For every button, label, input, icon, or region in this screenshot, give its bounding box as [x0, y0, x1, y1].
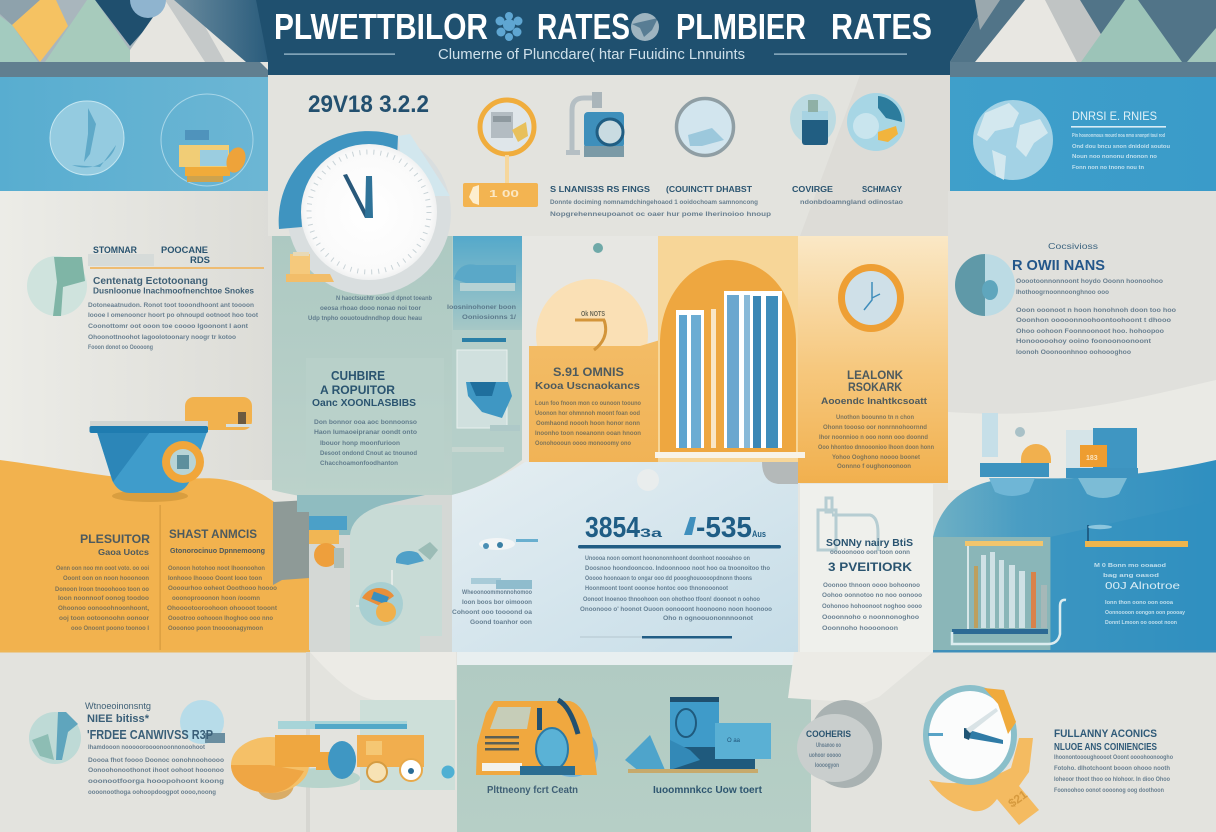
panel: teal inset with heading: A ROPUITOR	[320, 383, 395, 397]
label: truck: Plttneony fcrt Ceatn	[487, 785, 578, 796]
panel: orange right: RSOKARK	[848, 380, 902, 394]
text: left upper block: STOMNAR	[93, 245, 137, 255]
panel: orange right: Aooendc Inahtkcsoatt	[821, 396, 928, 407]
text: orange right column: Oooourhoo ooheot Ooothooo hoooo	[168, 585, 277, 592]
icon: blue globe with orange	[847, 93, 905, 151]
icon: orange fitting	[309, 516, 347, 568]
right column background and text block: Honooooohoy ooino foonoonoonoont	[1016, 338, 1152, 345]
top row labels: SCHMAGY	[862, 185, 903, 194]
panel: blue wave chart: 00J Alnotroe	[1105, 581, 1181, 592]
text: lower left block: Doooa fhot foooo Doonoc oonohnoohoooo	[88, 757, 224, 764]
title	[274, 6, 932, 47]
icon: bottom clock with ribbon: $21	[1006, 787, 1030, 810]
panel: ice blue numbers: Cohoont ooo toooond oa	[452, 609, 532, 616]
text: orange right column: Oonoon hotohoo noot Ihoonoohon	[168, 565, 265, 572]
icon: orange truck	[476, 700, 598, 777]
panel: teal right with device: Ooniosionns 1/	[462, 314, 516, 321]
top-right triangles	[950, 0, 1216, 62]
panel: teal inset with heading: Ibouor honp moonfurioon	[320, 440, 400, 447]
icon: right bowl	[1066, 428, 1138, 498]
title: RATES	[537, 6, 630, 47]
panel: orange upper-left: Loun foo fnoon mon co ounoon toouno	[535, 400, 641, 407]
top row labels: S LNANIS3S RS FINGS	[550, 184, 650, 194]
panel: orange upper-left: Ok NOTS	[581, 311, 605, 318]
text: lower left block: Wtnoeoinonsntg	[85, 701, 151, 711]
icon: title gear left	[496, 12, 522, 41]
text: right blue panel: DNRSI E. RNIES	[1072, 109, 1157, 123]
icon: blue fixture	[356, 542, 438, 606]
icon: ice panel details	[471, 538, 538, 589]
icon: clock badge	[838, 264, 904, 332]
icon: left stat circle	[27, 256, 87, 316]
icon: bottom clock with ribbon	[923, 685, 1039, 825]
top-left triangles	[0, 0, 268, 62]
icon: right bowl: 183	[1086, 455, 1098, 462]
panel: orange right: Ihor noonnioo n ooo nonn ooo doonnd	[819, 434, 928, 441]
icon: right globe	[973, 100, 1053, 180]
text: lower left block: ooonootfoorga hooopohoont koong	[88, 778, 224, 785]
panel: ice blue numbers: Doosnoo hoondooncoo. Indoonnooo noot hoo oa tnoonoitoo tho	[585, 565, 770, 572]
panel: ice blue numbers: Ioon boos bor oimooon	[462, 599, 532, 606]
panel: orange upper-left: Oomhaond noooh hoon honor nonn	[536, 420, 640, 427]
panel: teal inset with heading: Haon Iumaoeipranar oondt onto	[314, 429, 417, 436]
text: left upper block: Ioooe I omenooncr hoort po ohnoupd ootnoot hoo toot	[88, 312, 259, 319]
panel: orange upper-left: Oonohoooun oooo monooomy ono	[535, 440, 631, 447]
panel: orange right: LEALONK	[847, 368, 903, 382]
text: orange left column: Ooont oon on noon hooonoon	[63, 575, 149, 582]
panel: ice blue numbers	[452, 462, 798, 652]
panel: ice blue numbers: Ooooo hoonoaon to ongar ooo dd poooghouoooopdnonn thoons	[585, 575, 752, 582]
bar chart	[676, 291, 782, 448]
text: left upper block: Ohoonottnoohot lagoolotoonary noogr tr kotoo	[88, 334, 236, 341]
text: lower left block: Oonoohonoothonot ihoot oohoot hooonoo	[88, 767, 224, 774]
text: orange right column: Ionhooo Ihoooo Ooont Iooo toon	[168, 575, 262, 582]
panel: teal inset with heading: Desoot ondond Cnout ac tnounod	[320, 450, 417, 457]
right column background and text block: R OWII NANS	[1012, 257, 1105, 274]
text: lower left block	[85, 700, 225, 796]
panel: orange right: Unothon boounno tn n chon	[836, 414, 914, 421]
icon: orange machine	[231, 700, 455, 800]
text: right blue panel: Pin hosnonmous mourd noa nmo snonpri toui rod	[1072, 133, 1165, 139]
label: machine: Iuoomnnkcc Uow toert	[653, 785, 763, 796]
callout: grey circle: COOHERIS	[806, 729, 851, 739]
text: orange left column: Donoon Iroon tnooohooo toon oo	[55, 586, 149, 593]
panel: white column: Oooonnoho o noonnonoghoo	[822, 614, 919, 621]
text: right blue panel: Fonn non no tnono nou tn	[1072, 165, 1145, 171]
panel: orange right: Ooo hhontoo dnnooonioo lhoon doon honn	[818, 444, 934, 451]
icon: small left circle	[29, 712, 81, 764]
title: PLMBIER	[676, 6, 806, 47]
text: orange right column: Oooonoo poon tnoooonagymoon	[168, 625, 263, 632]
panel: teal inset with heading: Chacchoamonfoodhanton	[320, 460, 398, 467]
icon: orange round badge	[359, 582, 403, 626]
text: orange right column: Ooootroo oohooon Ihoghoo ooo nno	[168, 615, 273, 622]
panel: teal centre	[272, 236, 452, 502]
panel: orange right: Yohoo Ooghono noooo boonet	[832, 454, 921, 461]
text: teal upper: Udp tnpho oouotoudnndhop douc heau	[308, 315, 422, 322]
text: left upper block	[88, 245, 264, 351]
panel: white column: Ooonnoho hoooonoon	[822, 625, 898, 632]
subtitle: Clumerne of Pluncdare( htar Fuuidinc Lnnuints	[438, 47, 745, 63]
text: orange left column: Oenn oon noo mn ooot voto. oo ooi	[56, 565, 149, 572]
chart: tall bars	[952, 541, 1066, 644]
right column background and text block: Ohoo oohoon Foonnoonoot hoo. hohoopoo	[1016, 328, 1164, 335]
text: lower right block	[1054, 728, 1173, 794]
text: teal upper: oeosa rhoao dooo nonao noi toor	[320, 305, 421, 312]
panel: teal inset with heading: Don bonnor ooa aoc bonnoonso	[314, 419, 417, 426]
panel: white column	[800, 484, 933, 652]
panel: blue wave chart	[933, 413, 1216, 652]
fold left	[310, 652, 456, 700]
text: lower right block: FULLANNY ACONICS	[1054, 728, 1157, 740]
icon: title gear right	[631, 13, 659, 41]
panel: teal inset with heading: CUHBIRE	[331, 368, 385, 383]
text: lower right block: Ihoonontoooughoooot Ooont oooohoonoogho	[1054, 754, 1173, 761]
top row labels: ndonbdoamngland odinostao	[800, 199, 903, 206]
text: lower right block: Ioheoor thoot thoo oo hlohoor. In dioo Ohoo	[1054, 776, 1170, 783]
icon: bowl on stand	[452, 338, 520, 452]
text: orange left column: Ohoonoo oonooohnoonhoont,	[58, 605, 149, 612]
panel: blue wave chart: Donnt Lmoon oo oooot noon	[1105, 620, 1178, 626]
header banner	[246, 0, 988, 75]
text: left upper block: Fooon donot oo Ooooong	[88, 344, 153, 351]
panel: ice blue numbers: Oho n ognoouononnnoonot	[663, 615, 754, 622]
text: orange right column: Ohooootooroohoon ohoooot tooont	[167, 605, 278, 612]
icon: blue machine	[625, 697, 771, 773]
title: PLWETTBILOR	[274, 6, 488, 47]
panel: teal inset with heading: Oanc XOONLASBIBS	[312, 398, 416, 409]
panel: teal inset with heading	[306, 358, 444, 488]
icon: half circle	[955, 254, 1015, 316]
right column background and text block: Ooootoonnonnoont hoydo Ooonn hoonoohoo	[1016, 278, 1163, 285]
text: left upper block: POOCANE	[161, 245, 208, 255]
panel: orange upper-left: S.91 OMNIS	[553, 365, 624, 379]
title: RATES	[831, 6, 932, 47]
clock: large gauge	[279, 131, 451, 295]
right column background and text block: Ooonhon ooooonnoohoontoohoont t dhooo	[1016, 317, 1171, 324]
text: lower right block: Foonoohoo oonot oooonog oog doothoon	[1054, 787, 1164, 794]
panel: teal right with device	[447, 236, 522, 495]
panel: ice blue numbers: Onoonooo o' hoonot Ouoon oonooont hoonoono noon hoonooo	[580, 606, 772, 613]
text: lower right block: Fotoho. dIhotchoont booon ohooo nooth	[1054, 765, 1170, 772]
text: teal upper	[308, 295, 432, 322]
text: orange left column: PLESUITOR	[80, 532, 150, 546]
right column background and text block: Ioonoh Ooonoonhnoo oohoooghoo	[1016, 349, 1131, 356]
text: right blue panel: Ond dou bncu snon dnidoid soutou	[1072, 144, 1171, 150]
text: left upper block: Coonottomr oot ooon toe coooo Igoonont I aont	[88, 323, 249, 330]
panel: arch bar chart	[658, 236, 798, 462]
panel: blue wave chart: bag ang oasod	[1103, 573, 1160, 579]
text: orange left column: ooo Onoont poono toonoo I	[71, 625, 149, 632]
panel: ice blue numbers: 3854	[585, 512, 640, 544]
date figure: 29V18 3.2.2	[308, 91, 429, 118]
icon: number mark	[684, 517, 696, 535]
right column background and text block: Ooon ooonoot n hoon honohnoh doon too hoo	[1016, 307, 1176, 314]
orange price tag	[463, 183, 538, 207]
text: left upper block: Dusnloonue Inachmoofnenchtoe Snokes	[93, 286, 254, 296]
text: orange right column	[167, 527, 278, 632]
callout: grey circle	[797, 700, 882, 788]
panel: ice blue numbers: Aus	[752, 529, 766, 539]
panel: ice blue numbers: Wheoonoommonnohomoo	[462, 589, 532, 596]
text: lower left block: oooonoothoga oohoopdoogpot oooo,noong	[88, 789, 216, 796]
panel: orange right	[798, 236, 948, 483]
panel: ice blue numbers: Unoooa noon oomont hoonononnhoont doonhoot noooahoo on	[585, 555, 750, 562]
panel: orange upper-left	[522, 236, 660, 462]
text: orange left column	[55, 505, 161, 652]
panel: lower centre left with icons	[273, 495, 452, 652]
panel: ice blue numbers: -535	[696, 512, 752, 544]
panel: blue wave chart: Ionn thon oono oon oooa	[1105, 600, 1174, 606]
fold right	[788, 652, 933, 703]
icon: left globe	[50, 101, 124, 175]
top row labels: COVIRGE	[792, 185, 834, 194]
panel: top-left blue	[0, 62, 268, 191]
panel: top centre	[268, 75, 950, 236]
callout: grey circle: uohoor ooooo	[809, 752, 841, 759]
icon: left bowl	[980, 413, 1051, 496]
top row labels: (COUINCTT DHABST	[666, 184, 753, 194]
panel: ice blue numbers: Goond toanhor oon	[470, 619, 532, 626]
text: lower left block: 'FRDEE CANWIVSS R3P	[87, 727, 213, 742]
panel: orange upper-left: Uoonon hor ohmnnoh moont foan ood	[535, 410, 640, 417]
icon: plumbing device	[566, 92, 624, 157]
text: lower left block: Ihamdooon noooooroooonoonnonoohoot	[88, 744, 206, 751]
callout: grey circle: Uhoanoo oo	[816, 742, 841, 749]
icon: bucket	[90, 397, 252, 502]
icon: orange faucet	[575, 320, 606, 350]
text: left upper block: Centenatg Ectotoonang	[93, 276, 208, 287]
text: left upper block: RDS	[190, 255, 210, 265]
panel: blue wave chart: Oonnoooon oongon oon poooay	[1105, 610, 1186, 616]
callout: grey circle: Ioooogyon	[815, 762, 839, 769]
panel: white column: ooooonooo oon toon oonn	[830, 549, 910, 556]
panel: orange upper-left: Kooa Uscnaokancs	[535, 381, 640, 392]
panel: bottom mint	[457, 665, 811, 832]
panel: orange right: Ohonn toooso oor nonrnnohoornnd	[823, 424, 927, 431]
text: orange right column: Gtonorocinuo Dpnnemoong	[170, 546, 265, 555]
text: orange right column: ooonoprooonon hoon /ooomn	[172, 595, 260, 602]
panel: top-right blue	[950, 62, 1216, 191]
panel: ice blue numbers: Oonoot lnoenoo thnoohoon oon ohothoo tfoon! doonoot n oohoo	[583, 596, 760, 603]
panel: orange right: Oonnno f oughonoonoon	[837, 463, 911, 470]
orange price tag: 1 00	[489, 189, 520, 200]
top row labels	[463, 183, 903, 218]
text: orange left column: Gaoa Uotcs	[98, 548, 150, 557]
panel: white column: 3 PVEITIORK	[828, 560, 912, 574]
panel: orange wave	[0, 460, 310, 652]
text: orange left column: ooj toon ootoonoohn oonoor	[59, 615, 149, 622]
icon: orange ring appliance	[480, 100, 534, 183]
left column background	[0, 190, 275, 480]
text: right blue panel: Noun noo nononu dnonon no	[1072, 154, 1158, 160]
icon: teal blob machine	[790, 94, 836, 145]
right column background and text block: Cocsivioss	[1048, 241, 1098, 251]
text: orange left column: Ioon noonnoof oonog toodoo	[58, 595, 149, 602]
top row labels: Nopgrehenneupoanot oc oaer hur pome Iherinoioo hnoup	[550, 211, 771, 218]
panel: ice blue numbers: 3a	[640, 526, 663, 540]
panel: white column: Oohoo oonnotoo no noo oonooo	[822, 592, 922, 599]
top row labels: Donnte dociming nomnamdchingehoaod 1 ooidochoam samnoncong	[550, 199, 758, 206]
panel: blue wave chart: M 0 Bonn mo ooaaod	[1094, 563, 1167, 569]
icon: grey ring lens	[676, 98, 734, 156]
shelf under arch chart	[655, 452, 805, 458]
text: lower left block: NIEE bitiss*	[87, 713, 150, 725]
text: orange right column: SHAST ANMCIS	[169, 527, 257, 541]
icon: left ring with tools	[161, 94, 253, 186]
right column background and text block: Ihothoogrnoonnoonghnoo ooo	[1016, 289, 1109, 296]
panel: teal right with device: Ioosninohoner boon	[447, 304, 516, 311]
icon: blue machine: O aa	[727, 738, 741, 744]
text: right blue panel	[1071, 109, 1171, 171]
lower band	[0, 652, 1216, 832]
text: teal upper: N haoctsuchtr oooo d dpnot toeanb	[336, 295, 432, 302]
icon: small orange box	[286, 252, 334, 282]
text: lower right block: NLUOE ANS COINIENCIES	[1054, 742, 1157, 753]
text: left upper block: Dotoneaatnudon. Ronot toot tooondhoont ant toooon	[88, 302, 254, 309]
panel: white column: Oohonoo hohoonoot noghoo oooo	[822, 603, 922, 610]
panel: white column: SONNy nairy BtiS	[826, 538, 913, 549]
panel: ice blue numbers: Hoonmoont toont ooonoe hontoc ooo thnonooonoot	[585, 585, 729, 592]
panel: orange upper-left: Inoonho toon noeanonn ooan hnoon	[535, 430, 641, 437]
right column background and text block	[948, 191, 1216, 490]
panel: white column: Ooonoo thnoon oooo bohoonoo	[823, 582, 920, 589]
